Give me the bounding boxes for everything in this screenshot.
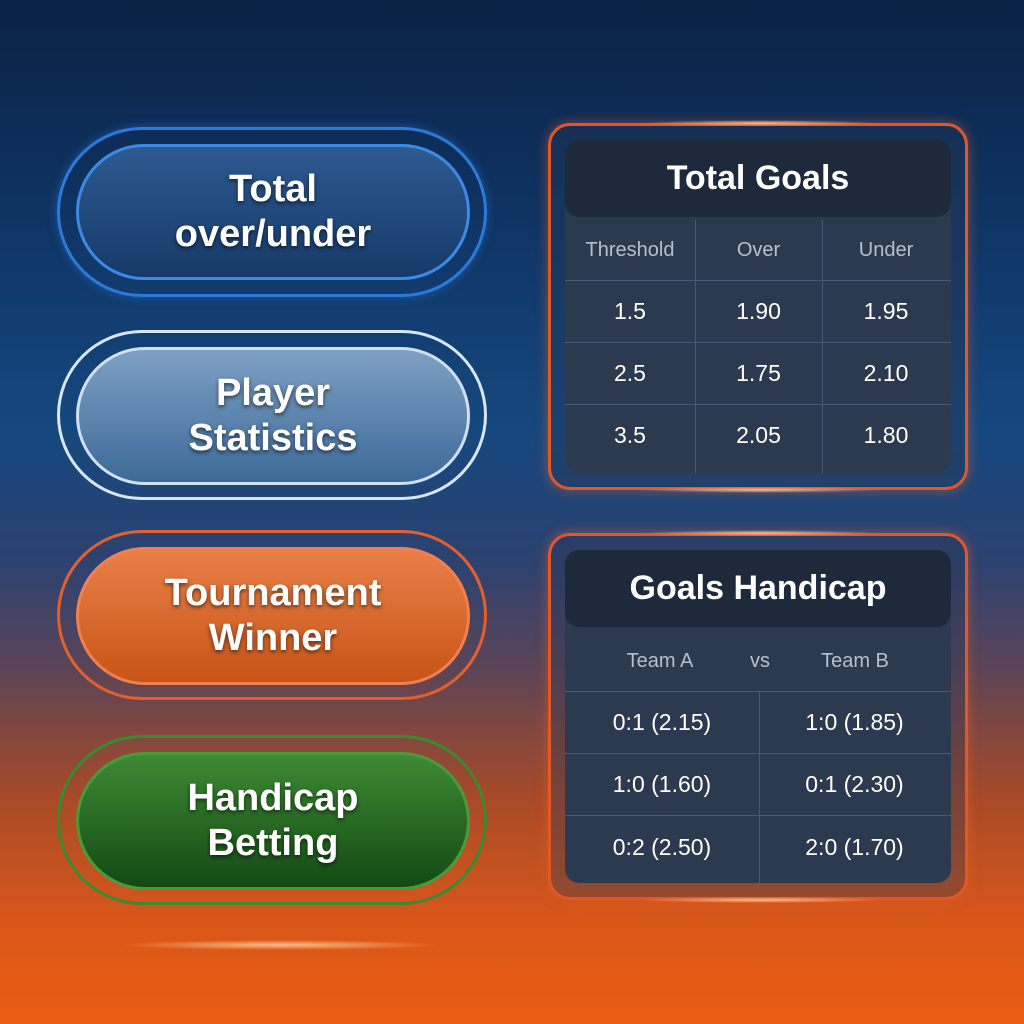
panel: goals handicap: vs (750, 650, 770, 672)
panel: total goals: 2.05 (736, 422, 781, 448)
panel: total goals: 2.5 (614, 360, 646, 386)
pill: handicap betting: Betting (208, 822, 338, 864)
pill: player statistics: Player (216, 372, 330, 414)
panel: total goals: Under (859, 238, 913, 260)
panel: total goals: Over (737, 238, 780, 260)
panel: total goals: 1.5 (614, 298, 646, 324)
heading: goals handicap: Goals Handicap (630, 569, 886, 607)
heading: goals handicap (565, 550, 951, 627)
panel: goals handicap: 1:0 (1.85) (805, 708, 904, 734)
panel: total goals: 1.90 (736, 298, 781, 324)
pill: tournament winner: Winner (209, 617, 337, 659)
panel: goals handicap: 0:2 (2.50) (613, 834, 711, 860)
pill: tournament winner: Tournament (165, 572, 381, 614)
pill: total over/under (57, 127, 487, 297)
panel: total goals: 2.10 (864, 360, 908, 386)
pill: tournament winner (57, 530, 487, 700)
panel: total goals (548, 123, 968, 490)
panel: goals handicap: Team A (627, 650, 693, 672)
panel: total goals: 3.5 (614, 422, 646, 448)
panel: total goals: 1.80 (864, 422, 908, 448)
panel: goals handicap: 2:0 (1.70) (805, 834, 904, 860)
pill: handicap betting: Handicap (187, 777, 359, 819)
panel: goals handicap (548, 533, 968, 900)
heading: total goals (565, 140, 951, 217)
panel: goals handicap: 0:1 (2.15) (613, 708, 711, 734)
pill: total over/under: Total (229, 168, 317, 210)
heading: total goals: Total Goals (667, 159, 849, 197)
panel: total goals: 1.95 (864, 298, 908, 324)
panel: goals handicap: 0:1 (2.30) (805, 770, 904, 796)
panel: total goals: 1.75 (736, 360, 781, 386)
pill: player statistics: Statistics (189, 417, 357, 459)
pill: handicap betting (57, 735, 487, 905)
pill: total over/under: over/under (175, 213, 371, 255)
pill: player statistics (57, 330, 487, 500)
panel: total goals: Threshold (586, 238, 674, 260)
panel: goals handicap: 1:0 (1.60) (613, 770, 711, 796)
panel: goals handicap: Team B (821, 650, 889, 672)
